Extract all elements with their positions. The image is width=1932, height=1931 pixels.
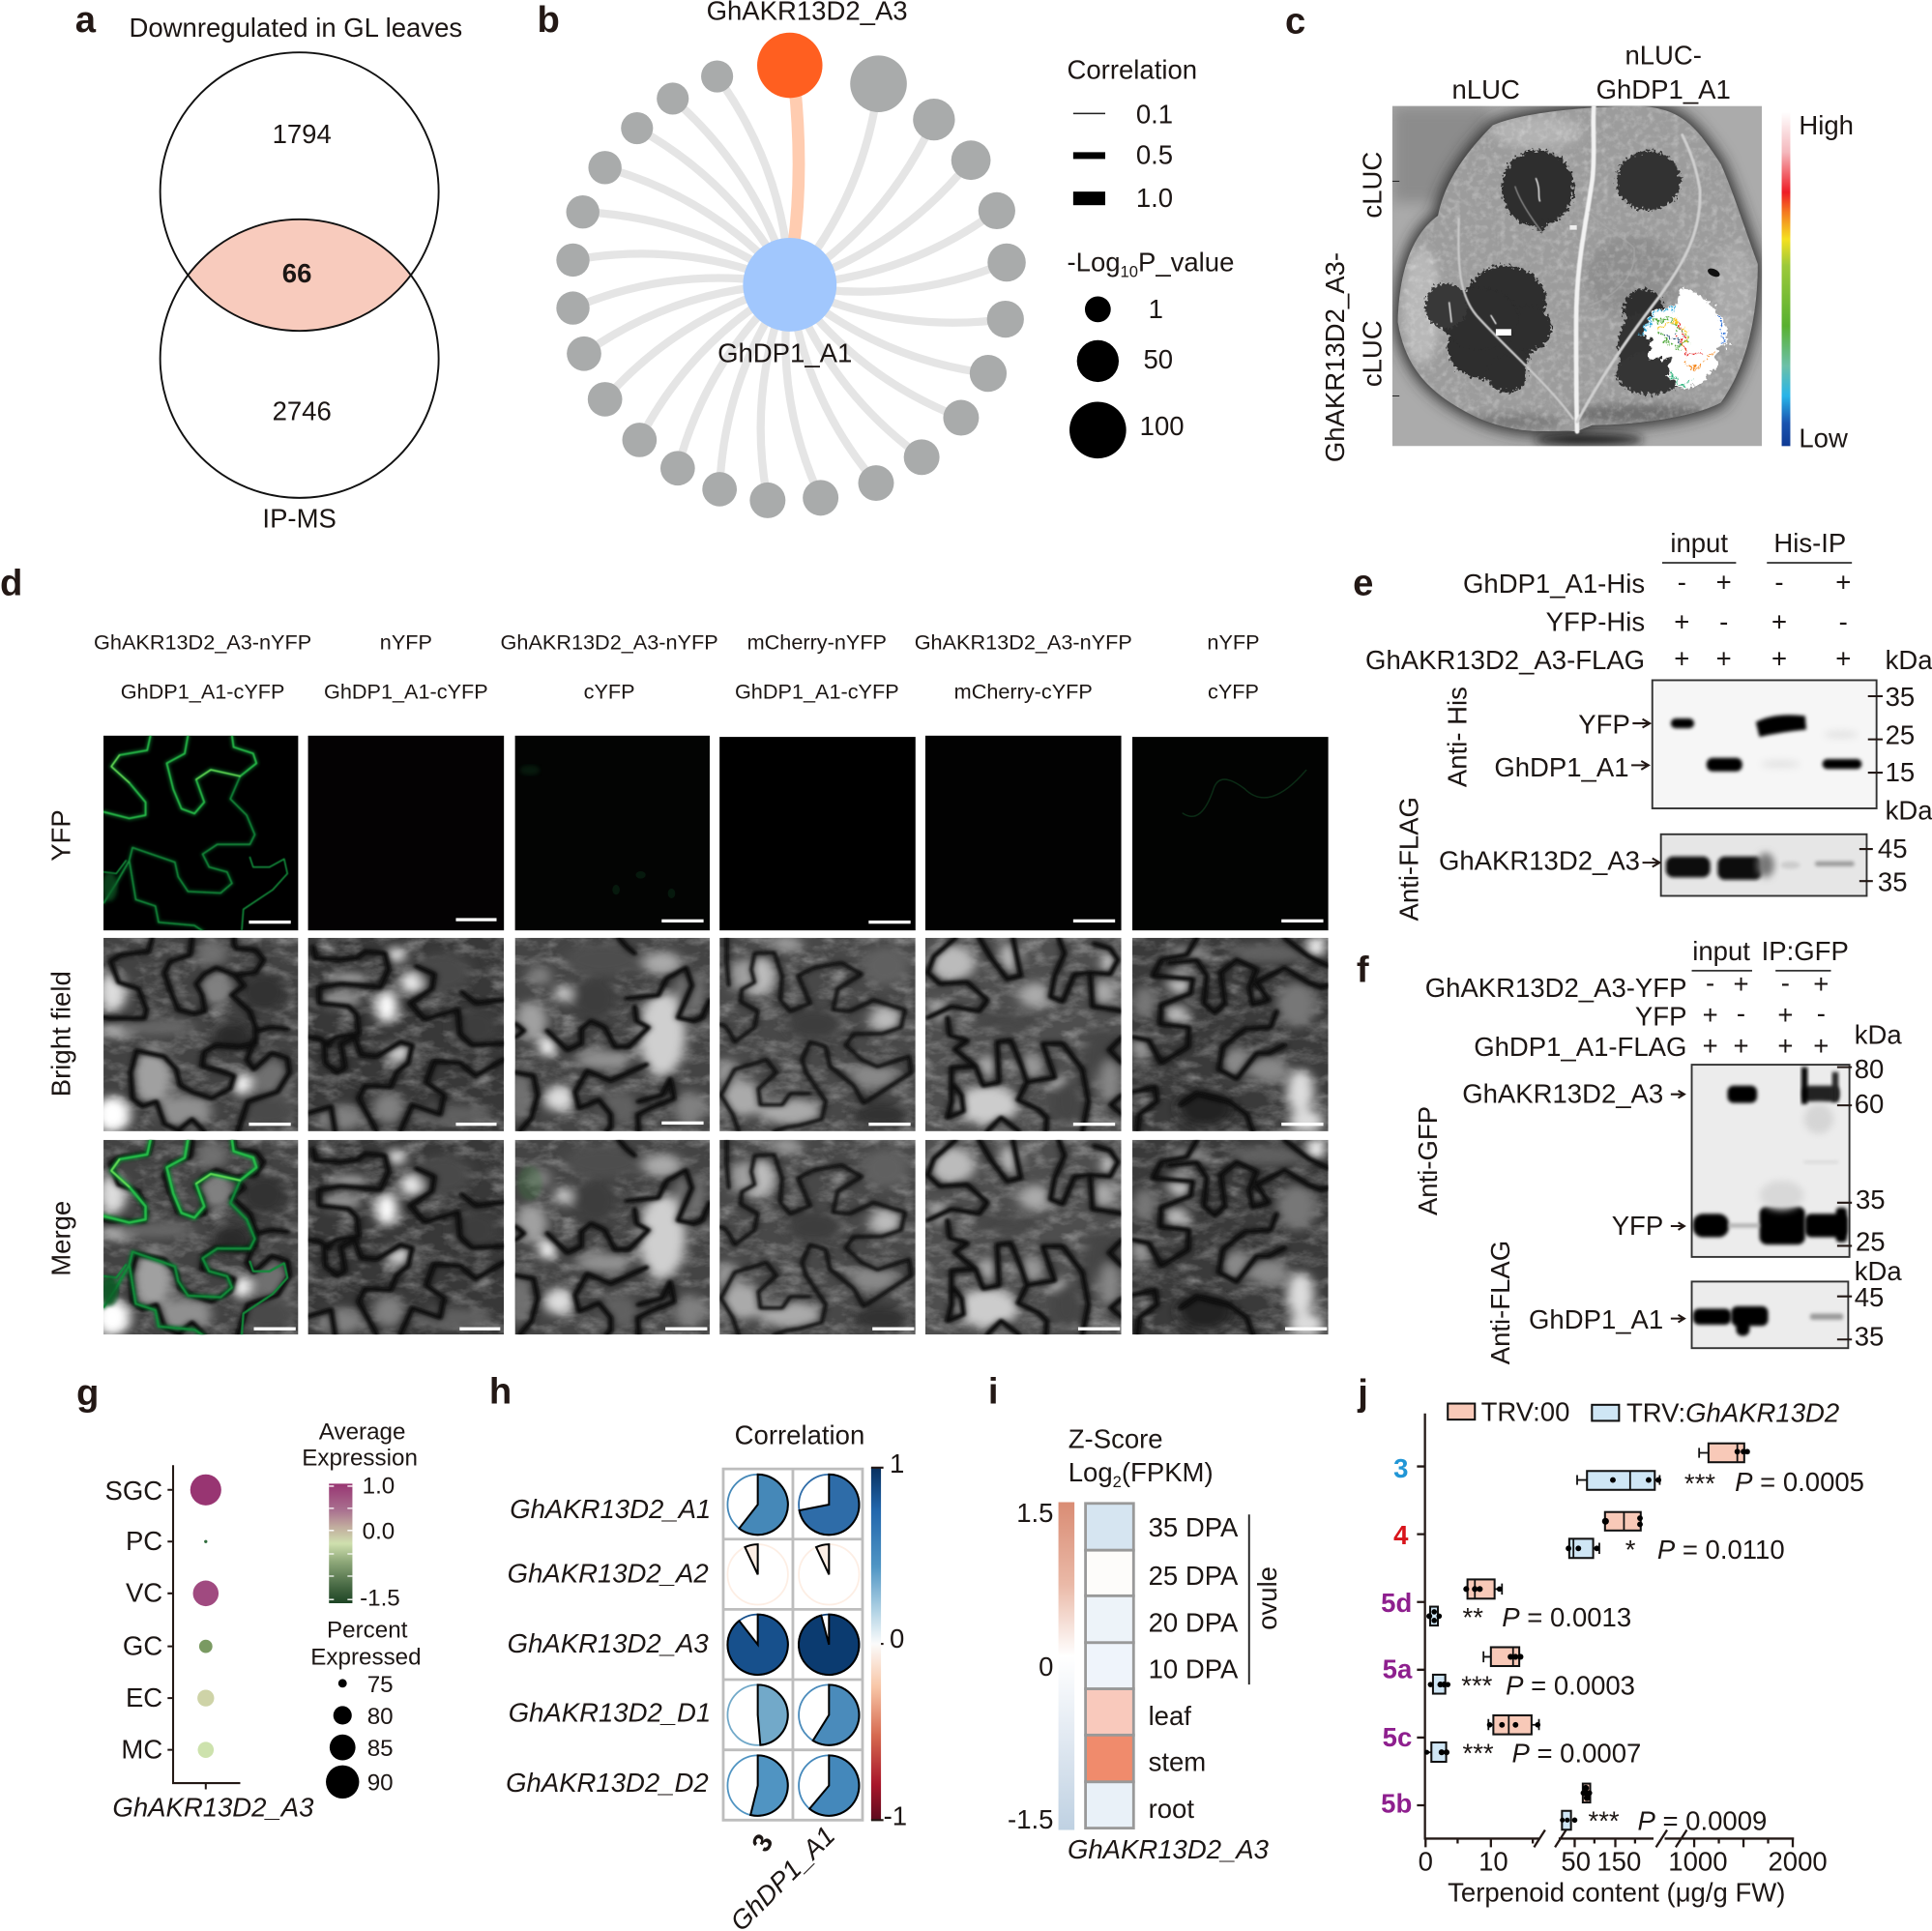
compound labels: [1381, 1453, 1413, 1819]
row label Bright field: Bright field: [46, 971, 76, 1097]
size markers: kDa: [1886, 795, 1932, 825]
x tick labels: 50: [1561, 1847, 1591, 1877]
panel g: dot plot: [76, 1372, 422, 1822]
construct labels: GhAKR13D2_A3-nYFP: [915, 630, 1132, 655]
panel e: His pull-down western blot: [1353, 528, 1932, 921]
row label GhAKR13D2_A3-cLUC: GhAKR13D2_A3-: [1320, 252, 1350, 462]
legend: -log10 P value: 50: [1143, 344, 1173, 374]
heading: Correlation: [735, 1420, 864, 1450]
panel f: GFP co-IP western blot: [1357, 936, 1902, 1364]
heading: Log: [1068, 1457, 1113, 1487]
significance labels: ***: [1588, 1805, 1620, 1835]
row labels: [1149, 1512, 1239, 1824]
venn overlap lens: [188, 219, 411, 331]
band labels with arrows: GhDP1_A1: [1529, 1304, 1663, 1334]
label Low: Low: [1799, 424, 1848, 453]
sample rows: -: [1678, 568, 1686, 598]
row labels: root: [1149, 1794, 1194, 1824]
x tick labels: 10: [1478, 1847, 1508, 1877]
legend: TRV:GhAKR13D2: [1626, 1398, 1839, 1428]
ovule bracket: ovule: [1252, 1566, 1282, 1630]
legend: average expression: -1.5: [360, 1586, 400, 1612]
sample rows: +: [1674, 644, 1689, 674]
legend: -log10 P value: 100: [1140, 411, 1185, 441]
label High: High: [1799, 110, 1854, 140]
size markers: kDa: [1855, 1019, 1902, 1049]
heading: Z-Score: [1068, 1423, 1163, 1453]
sample rows: GhDP1_A1-FLAG: [1474, 1032, 1686, 1062]
construct labels: GhDP1_A1-cYFP: [735, 680, 899, 704]
row labels: GhAKR13D2_D2: [506, 1768, 709, 1798]
Anti-FLAG label: Anti-FLAG: [1394, 797, 1424, 921]
colorbar labels: 0: [1039, 1652, 1053, 1682]
sample rows: -: [1719, 606, 1728, 636]
x tick labels: 150: [1596, 1847, 1641, 1877]
construct labels: mCherry-cYFP: [954, 680, 1093, 704]
blot: anti-His: [1653, 680, 1877, 808]
size markers: [1859, 682, 1932, 896]
row labels: stem: [1149, 1746, 1206, 1776]
compound labels: 3: [1393, 1453, 1408, 1483]
colorbar labels: -1.5: [1008, 1804, 1053, 1834]
sample rows: +: [1835, 644, 1851, 674]
sample rows: +: [1716, 568, 1732, 598]
sample rows: GhAKR13D2_A3-FLAG: [1365, 645, 1645, 675]
construct labels: GhDP1_A1-cYFP: [121, 680, 284, 704]
significance labels: ***: [1684, 1468, 1715, 1498]
row label YFP: YFP: [46, 809, 76, 862]
row labels: GhAKR13D2_A2: [508, 1558, 709, 1588]
label b: b: [538, 0, 560, 41]
sample rows: -: [1706, 968, 1714, 998]
network edges: [573, 76, 1007, 500]
row labels: GhAKR13D2_A1: [510, 1494, 711, 1524]
edge to GhAKR13D2_A3: [794, 86, 799, 247]
legend: average expression: 0.0: [363, 1519, 395, 1545]
construct labels: mCherry-nYFP: [747, 630, 887, 655]
x tick labels: 1000: [1668, 1847, 1728, 1877]
label j: j: [1357, 1372, 1368, 1414]
panel c: luciferase leaf assay: [1285, 0, 1854, 462]
sample rows: -: [1839, 606, 1848, 636]
size markers: 45: [1855, 1282, 1884, 1312]
size markers: 25: [1856, 1227, 1886, 1257]
size markers: 35: [1856, 1185, 1886, 1214]
sample rows: +: [1777, 1000, 1793, 1030]
x axis title: Terpenoid content (μg/g FW): [1448, 1877, 1785, 1907]
legend: percent expressed: 90: [367, 1770, 394, 1797]
legend: percent expressed: [310, 1618, 422, 1799]
panel i: expression heatmap: [988, 1371, 1282, 1864]
lane headers: input: [1670, 528, 1728, 558]
legend: TRV:00: [1481, 1396, 1569, 1426]
band labels with arrows: YFP: [1612, 1211, 1663, 1241]
construct labels: [94, 630, 1260, 704]
pies: [727, 1475, 860, 1816]
sample rows: +: [1733, 969, 1749, 999]
significance labels: P = 0.0110: [1657, 1535, 1785, 1565]
lane headers: [1662, 528, 1852, 564]
boxes: compound 5a: [1428, 1648, 1523, 1694]
compound labels: 5d: [1381, 1588, 1412, 1618]
row labels: 25 DPA: [1149, 1561, 1239, 1591]
heading: 2: [1113, 1473, 1122, 1491]
row label cLUC: cLUC: [1357, 152, 1387, 219]
count 66: 66: [282, 258, 311, 288]
panel a: venn diagram: [75, 0, 462, 533]
axes: [167, 1465, 240, 1789]
legend: average expression: [302, 1419, 418, 1612]
heading: [1068, 1423, 1214, 1491]
x tick labels: [1419, 1847, 1828, 1877]
sample rows: -: [1737, 999, 1745, 1029]
significance labels: **: [1463, 1602, 1483, 1632]
row labels: GhAKR13D2_D1: [509, 1697, 711, 1727]
label e: e: [1353, 563, 1373, 604]
boxes: compound 5d: [1426, 1579, 1503, 1625]
lane headers: IP:GFP: [1762, 936, 1849, 966]
boxes: compound 3: [1577, 1443, 1750, 1490]
construct labels: cYFP: [584, 680, 635, 704]
y labels: VC: [126, 1578, 162, 1608]
legend: average expression: Expression: [302, 1445, 418, 1471]
sample rows: [1365, 568, 1851, 675]
legend: percent expressed: 85: [367, 1736, 394, 1762]
bright field row images: [95, 935, 1329, 1132]
Anti-His label: Anti- His: [1442, 687, 1472, 787]
legend: correlation: 0.1: [1136, 99, 1173, 129]
row labels: 35 DPA: [1149, 1512, 1239, 1542]
sample rows: +: [1813, 969, 1829, 999]
lane headers: input: [1692, 936, 1750, 966]
boxes: compound 4: [1566, 1512, 1643, 1558]
construct labels: nYFP: [380, 630, 432, 655]
sample rows: GhDP1_A1-His: [1463, 569, 1645, 599]
y labels: PC: [126, 1526, 162, 1556]
column label nLUC: nLUC: [1452, 74, 1520, 104]
label h: h: [489, 1371, 512, 1413]
legend: -log10 P value: [1067, 247, 1234, 458]
legend: percent expressed: Expressed: [310, 1645, 422, 1671]
panel b: correlation network: [538, 0, 1234, 518]
venn circle top: [161, 52, 439, 331]
band labels with arrows: GhAKR13D2_A3: [1439, 846, 1640, 876]
blot: anti-FLAG: [1661, 834, 1866, 895]
significance labels: P = 0.0005: [1735, 1467, 1864, 1497]
blot: anti-FLAG: [1692, 1281, 1848, 1348]
x tick labels: 2000: [1769, 1847, 1828, 1877]
label d: d: [0, 563, 22, 604]
legend: correlation: 1.0: [1136, 183, 1173, 213]
sample rows: +: [1716, 644, 1732, 674]
heading: (FPKM): [1122, 1457, 1214, 1487]
significance labels: P = 0.0003: [1506, 1670, 1635, 1700]
compound labels: 5c: [1383, 1722, 1412, 1752]
legend: correlation: [1067, 55, 1197, 213]
legend: percent expressed: 75: [367, 1672, 394, 1698]
legend: -log10 P value: P_value: [1138, 247, 1234, 277]
legend: -log10 P value: -Log: [1067, 247, 1121, 277]
construct labels: nYFP: [1207, 630, 1260, 655]
blot: anti-GFP: [1692, 1065, 1850, 1257]
label kDa: kDa: [1886, 645, 1932, 675]
legend: average expression: 1.0: [363, 1474, 395, 1500]
panel d: BiFC microscopy: [0, 563, 1329, 1336]
legend: percent expressed: Percent: [327, 1618, 408, 1644]
row labels: 20 DPA: [1149, 1607, 1239, 1637]
row labels: [506, 1494, 711, 1798]
boxes: compound 5c: [1424, 1715, 1540, 1762]
significance labels: P = 0.0009: [1637, 1805, 1767, 1835]
construct labels: GhDP1_A1-cYFP: [324, 680, 488, 704]
sample rows: +: [1703, 1031, 1718, 1061]
venn circle bottom: [161, 219, 439, 498]
node GhDP1_A1: [743, 238, 836, 332]
Anti-FLAG label: Anti-FLAG: [1485, 1241, 1515, 1364]
panel h: correlation pie matrix: [489, 1371, 907, 1931]
band labels with arrows: YFP: [1578, 709, 1630, 739]
construct labels: GhAKR13D2_A3-nYFP: [501, 630, 718, 655]
label c: c: [1285, 0, 1305, 42]
legend: -log10 P value: 1: [1149, 294, 1163, 324]
column label nLUC-GhDP1_A1: GhDP1_A1: [1596, 74, 1731, 104]
x label 3: 3: [746, 1829, 778, 1857]
sample rows: +: [1771, 644, 1787, 674]
band labels with arrows: GhAKR13D2_A3: [1462, 1079, 1663, 1109]
luminescence colorbar: [1782, 112, 1790, 446]
size markers: kDa: [1855, 1256, 1902, 1286]
count 2746: 2746: [273, 396, 332, 426]
sample rows: -: [1774, 568, 1784, 598]
x tick labels: 0: [1419, 1847, 1433, 1877]
heatmap: [1086, 1504, 1133, 1829]
y labels: MC: [121, 1735, 162, 1765]
row labels: leaf: [1149, 1701, 1191, 1731]
size markers: 35: [1878, 866, 1908, 896]
row label Merge: Merge: [46, 1201, 76, 1276]
legend: -log10 P value: 10: [1121, 263, 1138, 281]
colorbar: [871, 1448, 907, 1830]
label a: a: [75, 0, 97, 41]
construct labels: GhAKR13D2_A3-nYFP: [94, 630, 311, 655]
sample rows: +: [1674, 606, 1689, 636]
x label: GhAKR13D2_A3: [112, 1792, 314, 1822]
sample rows: GhAKR13D2_A3-YFP: [1425, 973, 1686, 1003]
sample rows: +: [1835, 568, 1851, 598]
legend: [1448, 1396, 1839, 1428]
significance labels: ***: [1463, 1738, 1494, 1768]
y labels: GC: [123, 1631, 162, 1661]
size markers: 15: [1886, 757, 1915, 787]
legend: correlation: 0.5: [1136, 139, 1173, 169]
boxes: compound 5b: [1560, 1784, 1593, 1829]
sample rows: +: [1733, 1031, 1749, 1061]
label f: f: [1357, 950, 1369, 991]
significance labels: P = 0.0007: [1511, 1738, 1641, 1768]
sample rows: +: [1771, 606, 1787, 636]
leaf image: [1392, 106, 1762, 447]
sample rows: -: [1781, 968, 1790, 998]
lane headers: [1692, 936, 1849, 972]
size markers: 25: [1886, 720, 1915, 750]
matrix grid: [723, 1469, 863, 1820]
size markers: 35: [1886, 682, 1915, 712]
axes: [1417, 1414, 1794, 1847]
column label nLUC-GhDP1_A1: [1596, 40, 1731, 104]
network outer nodes: [556, 55, 1026, 518]
Anti-GFP label: Anti-GFP: [1413, 1106, 1443, 1215]
sample rows: YFP-His: [1546, 606, 1645, 636]
sample rows: +: [1777, 1031, 1793, 1061]
merge row images: [95, 1137, 1329, 1336]
compound labels: 5a: [1383, 1654, 1413, 1684]
band labels with arrows: GhDP1_A1: [1494, 752, 1629, 782]
lane headers: His-IP: [1773, 528, 1846, 558]
heading: downregulated in GL leaves: Downregulated in GL leaves: [129, 13, 462, 43]
legend: correlation: Correlation: [1067, 55, 1197, 85]
sample rows: YFP: [1635, 1001, 1686, 1031]
colorbar labels: [1008, 1498, 1053, 1834]
band labels with arrows: [1462, 1079, 1684, 1334]
label i: i: [988, 1371, 999, 1413]
colorbar: 1: [890, 1448, 904, 1478]
colorbar: -1: [884, 1800, 907, 1830]
row label GhAKR13D2_A3-cLUC: [1320, 252, 1387, 462]
label GhDP1_A1: GhDP1_A1: [717, 338, 852, 368]
size markers: 80: [1855, 1054, 1884, 1084]
size markers: 60: [1855, 1089, 1884, 1119]
y labels: EC: [126, 1682, 162, 1712]
colorbar: [1059, 1503, 1074, 1829]
sample rows: -: [1817, 999, 1826, 1029]
sample rows: [1425, 968, 1829, 1062]
y labels: SGC: [105, 1476, 162, 1506]
sample rows: +: [1703, 1000, 1718, 1030]
row label GhAKR13D2_A3-cLUC: cLUC: [1357, 320, 1387, 387]
x label: GhAKR13D2_A3: [1068, 1834, 1270, 1864]
significance labels: *: [1625, 1535, 1636, 1565]
column label nLUC-GhDP1_A1: nLUC-: [1625, 40, 1702, 70]
significance labels: P = 0.0013: [1502, 1602, 1631, 1632]
size markers: [1837, 1019, 1902, 1352]
size markers: 35: [1855, 1322, 1884, 1352]
label g: g: [76, 1372, 99, 1414]
dots: [190, 1475, 221, 1758]
legend: percent expressed: 80: [367, 1704, 394, 1730]
colorbar labels: 1.5: [1016, 1498, 1053, 1528]
significance labels: [1461, 1467, 1864, 1835]
construct labels: cYFP: [1208, 680, 1259, 704]
node GhAKR13D2_A3: [757, 33, 823, 98]
significance labels: ***: [1461, 1670, 1493, 1700]
row labels: 10 DPA: [1149, 1654, 1239, 1684]
compound labels: 5b: [1381, 1789, 1412, 1819]
sample rows: +: [1813, 1031, 1829, 1061]
colorbar: 0: [890, 1624, 904, 1653]
compound labels: 4: [1393, 1520, 1409, 1550]
label IP-MS: IP-MS: [262, 503, 337, 533]
YFP row images: [102, 736, 1329, 932]
legend: average expression: Average: [319, 1419, 405, 1446]
y labels: [105, 1476, 162, 1765]
band labels with arrows: [1439, 709, 1659, 876]
row labels: GhAKR13D2_A3: [508, 1628, 709, 1658]
count 1794: 1794: [273, 119, 332, 149]
size markers: 45: [1878, 834, 1908, 863]
panel j: terpenoid box plot: [1357, 1372, 1864, 1907]
